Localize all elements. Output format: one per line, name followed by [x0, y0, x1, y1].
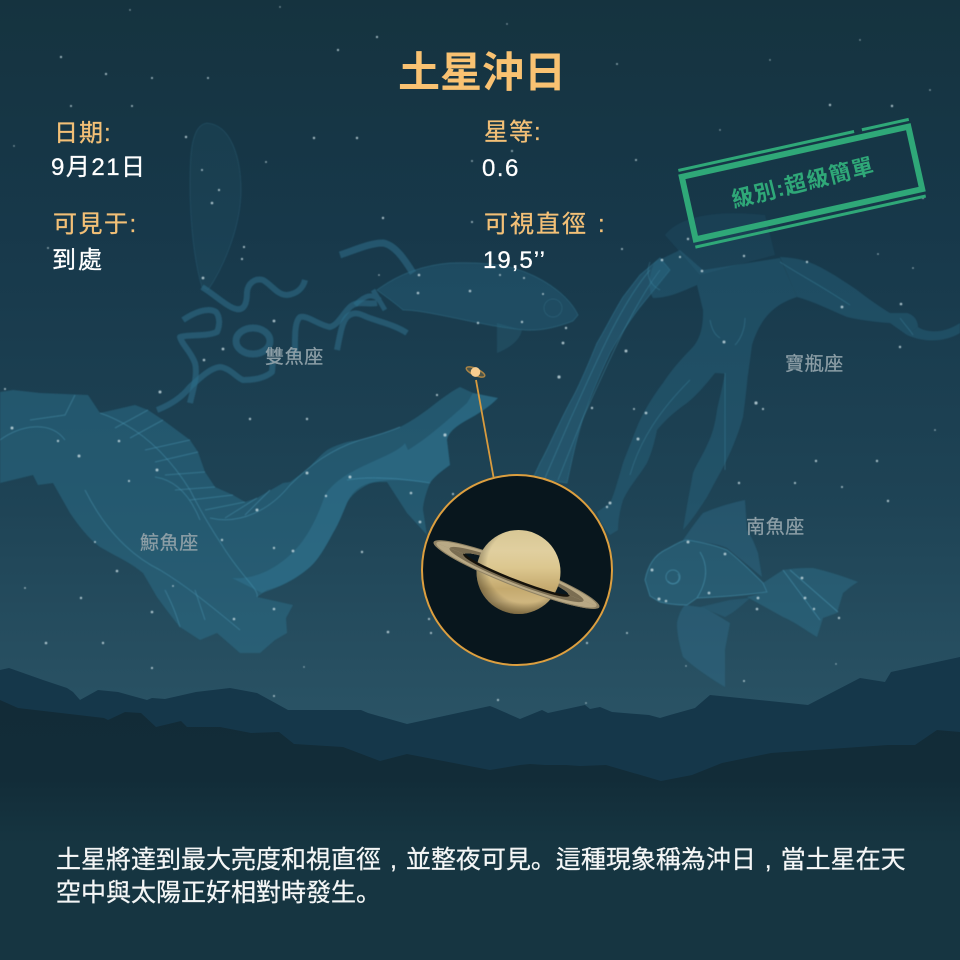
- near mountain ridge: [0, 700, 960, 960]
- left arm: [649, 250, 703, 298]
- stamp: difficulty level: 級別:超級簡單: [729, 153, 877, 213]
- head and jar: [665, 213, 775, 275]
- constellation label: 南魚座: 南魚座: [746, 516, 805, 538]
- info: date: 日期:: [54, 120, 112, 147]
- stream strands: [545, 270, 660, 480]
- right leg: [683, 345, 750, 530]
- constellation: Piscis Austrinus: [645, 500, 858, 687]
- back fins and outlines: [0, 395, 430, 630]
- info: visibility: 到處: [52, 247, 104, 274]
- lower fin: [677, 605, 730, 687]
- constellation label: 雙魚座: 雙魚座: [265, 346, 324, 368]
- fish fin: [497, 323, 522, 353]
- left leg: [597, 345, 725, 535]
- Saturn close-up circle: [415, 475, 620, 665]
- info: date: 9月21日: [51, 154, 147, 181]
- ring front arc: [434, 542, 600, 609]
- faint under fin: [700, 598, 750, 617]
- info: visibility: 可見于:: [53, 211, 138, 238]
- tail fin: [747, 568, 858, 637]
- info: magnitude: 星等:: [484, 119, 542, 146]
- constellation: Pisces: [157, 123, 578, 410]
- info: apparent diameter: 19,5’’: [483, 247, 546, 274]
- sea monster body: [0, 387, 498, 653]
- info: visibility: [52, 211, 138, 274]
- description text: 空中與太陽正好相對時發生。: [56, 879, 381, 907]
- water carrier figure: [597, 250, 960, 535]
- night sky background: [0, 0, 960, 760]
- body highlight band: [232, 393, 498, 593]
- info: magnitude: 0.6: [482, 155, 520, 182]
- torso: [693, 258, 797, 375]
- info: magnitude: [482, 119, 542, 182]
- right arm: [780, 257, 918, 335]
- constellation label: 鯨魚座: 鯨魚座: [140, 532, 199, 554]
- Saturn rings and globe: [434, 530, 600, 614]
- info: apparent diameter: 可視直徑: [484, 211, 588, 238]
- stars: [4, 6, 936, 704]
- icon: small Saturn marker: [464, 364, 487, 380]
- horizontal fish: [377, 263, 578, 330]
- stamp: difficulty level: [678, 119, 926, 247]
- dorsal fin: [683, 500, 762, 577]
- ribbons: [157, 243, 413, 410]
- pointer line to Saturn: [476, 380, 494, 477]
- fish body: [645, 540, 767, 605]
- constellation: Aquarius: [533, 213, 960, 535]
- water stream: [533, 258, 670, 483]
- description text: 土星將達到最大亮度和視直徑 , 並整夜可見。這種現象稱為沖日 , 當土星在天: [56, 846, 906, 874]
- Saturn globe: [476, 530, 560, 614]
- info: apparent diameter: [483, 211, 607, 274]
- vertical fish: [190, 123, 241, 290]
- fish eye: [544, 299, 562, 317]
- constellation: Cetus: [0, 387, 498, 653]
- constellation label: 寶瓶座: 寶瓶座: [785, 353, 844, 375]
- figure muscle lines: [630, 262, 913, 475]
- fish eye and gill: [666, 552, 838, 620]
- info: apparent diameter: :: [598, 211, 607, 238]
- trailing water: [907, 323, 960, 340]
- info: date: [51, 120, 147, 181]
- title: 土星沖日: [398, 49, 566, 96]
- far mountain ridge: [0, 657, 960, 800]
